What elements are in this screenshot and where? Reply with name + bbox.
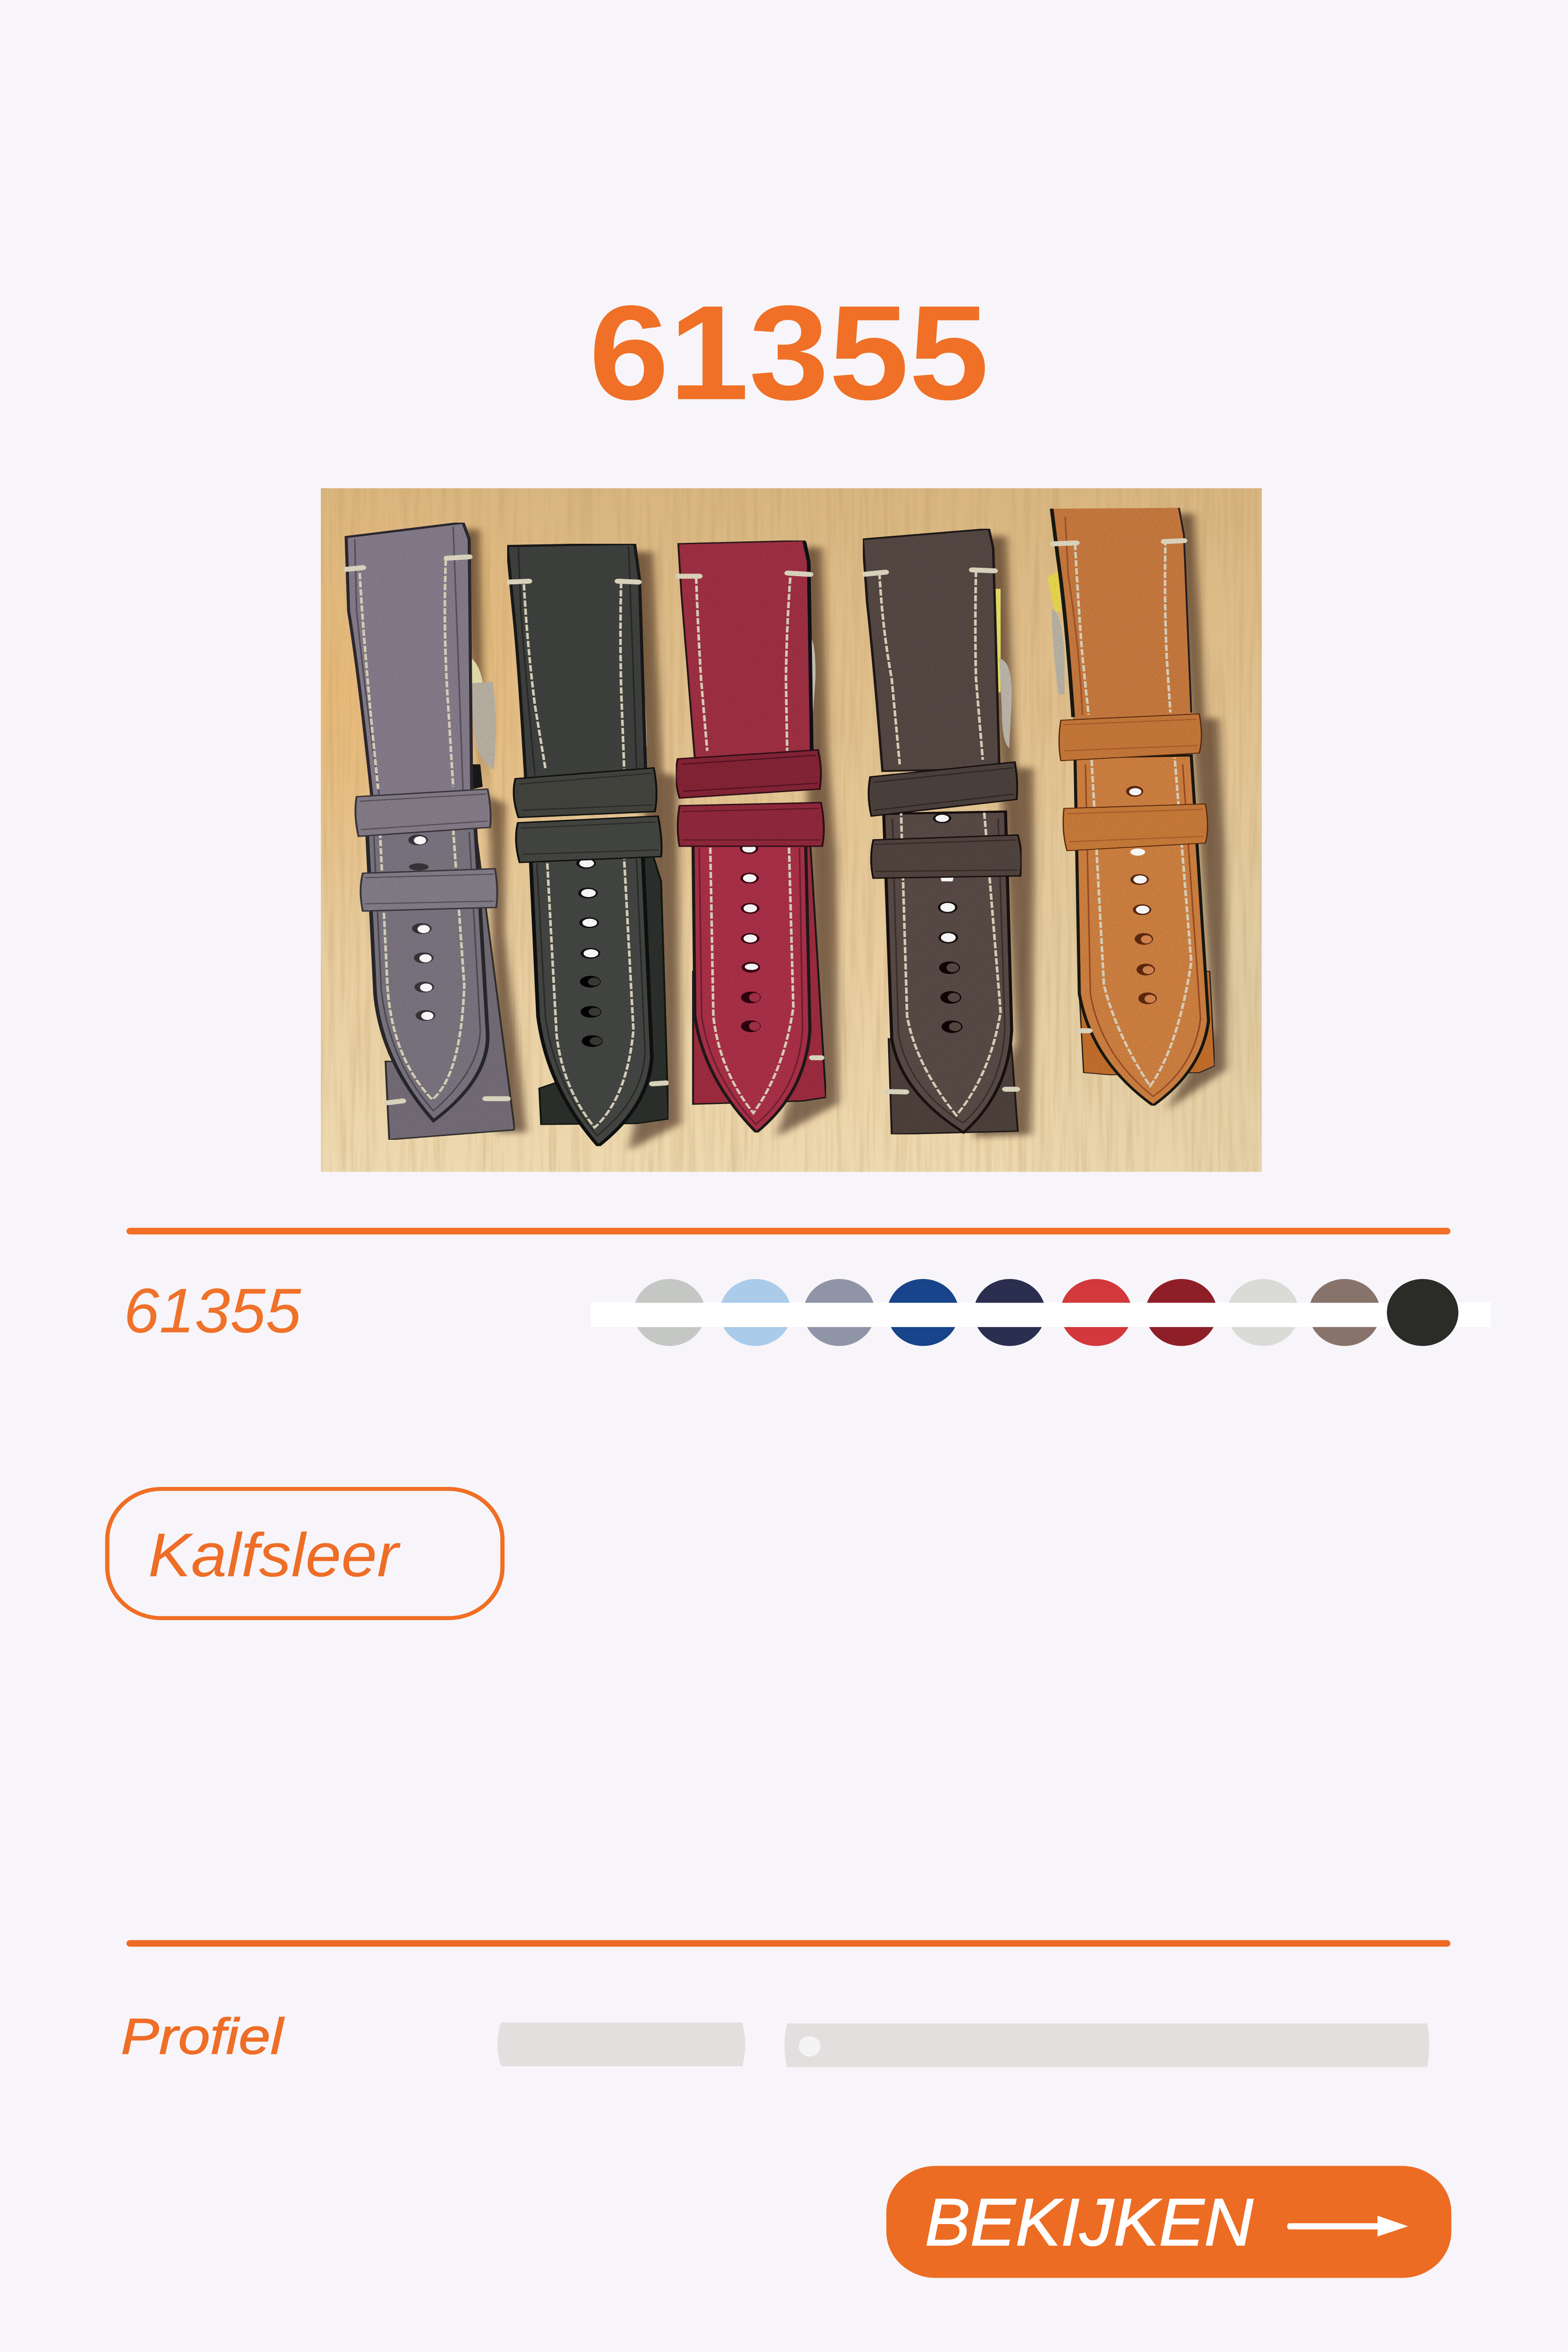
holes: black strap (576, 858, 603, 1047)
strap: red (676, 540, 826, 1132)
button: bekijken (886, 2166, 1451, 2278)
keeper loops: brown strap (868, 762, 1021, 882)
swatch: pale grey (1227, 1279, 1299, 1346)
arrow icon (1287, 2216, 1408, 2236)
photo: five leather watch straps on wood (321, 488, 1262, 1172)
profile: buckle end (498, 2023, 745, 2066)
title: 61355 (589, 277, 989, 428)
tag outline (107, 1489, 502, 1618)
divider: top (127, 1228, 1450, 1234)
keeper loops: red strap (676, 750, 824, 846)
swatch: light blue (720, 1279, 791, 1346)
profile label: Profiel (121, 2008, 285, 2065)
buckle: grey strap (470, 657, 496, 789)
holes: orange strap (1126, 786, 1157, 1004)
buckle: orange strap (1047, 571, 1065, 695)
white swatch band (591, 1303, 1491, 1327)
swatch: navy (974, 1279, 1045, 1346)
keeper loops: grey strap (356, 789, 497, 911)
swatch: taupe (1309, 1279, 1380, 1346)
swatch: burgundy (1146, 1279, 1217, 1346)
profile: strap body (785, 2024, 1429, 2067)
swatch: black (1387, 1279, 1458, 1346)
buckle: brown strap (995, 589, 1012, 748)
holes: red strap (740, 843, 761, 1032)
strap: brown (863, 529, 1021, 1134)
swatch: royal blue (887, 1279, 959, 1346)
strap hole (799, 2036, 820, 2057)
holes: brown strap (933, 813, 963, 1033)
swatch: red (1060, 1279, 1132, 1346)
swatch: slate grey (804, 1279, 875, 1346)
strap: black (507, 544, 669, 1146)
button label: BEKIJKEN (925, 2185, 1254, 2260)
strap shadows (456, 514, 1226, 1151)
straps drawn in photo space (344, 508, 1226, 1151)
colour swatches (591, 1279, 1491, 1346)
strap: orange (1047, 508, 1215, 1105)
strap: grey (344, 523, 515, 1140)
tag text: Kalfsleer (148, 1520, 401, 1589)
keeper loops: orange strap (1059, 714, 1208, 851)
buckle: red strap (808, 636, 815, 722)
material tag (107, 1489, 502, 1618)
holes: grey strap (408, 834, 435, 1021)
buckle: black strap (639, 663, 647, 747)
keeper loops: black strap (514, 768, 661, 862)
wooden table (321, 488, 1262, 1172)
divider: bottom (127, 1940, 1450, 1947)
swatch: silver grey (634, 1279, 705, 1346)
model number label: 61355 (124, 1276, 302, 1346)
